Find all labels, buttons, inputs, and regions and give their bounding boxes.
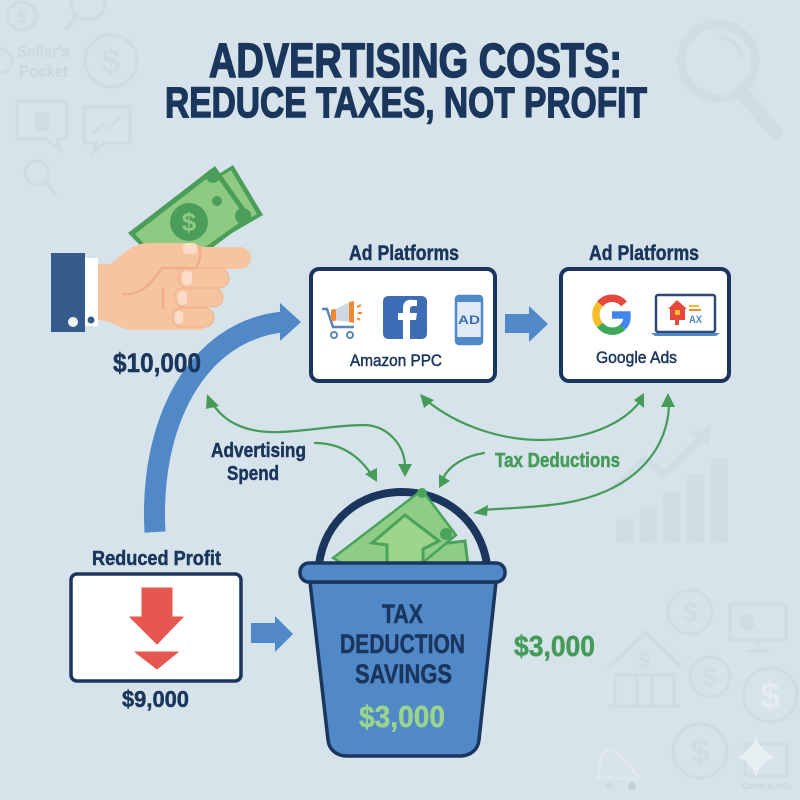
watermark icons: bottom right: Cook's Ads xyxy=(742,781,792,791)
icon: laptop ad: AX xyxy=(689,314,703,326)
amount: green $3,000: $3,000 xyxy=(514,631,595,663)
icon: red down arrow xyxy=(130,588,183,644)
label: tax deductions: Tax Deductions xyxy=(495,450,620,472)
arrow: profit to bucket xyxy=(251,616,293,652)
title: ADVERTISING COSTS: xyxy=(209,35,622,88)
panel: amazon ppc platforms xyxy=(311,269,495,381)
arrow: tax deductions to bucket xyxy=(439,453,484,488)
bucket: tax deduction savings xyxy=(300,488,505,756)
bucket text: SAVINGS xyxy=(355,659,452,689)
heading: ad platforms right: Ad Platforms xyxy=(589,242,699,265)
bucket text xyxy=(340,599,465,734)
label: amazon ppc: Amazon PPC xyxy=(350,351,442,370)
label: advertising spend: Advertising xyxy=(211,440,306,462)
amount: $9,000: $9,000 xyxy=(122,686,189,712)
arrow: google ads to bucket xyxy=(473,393,675,516)
icon: laptop ad xyxy=(651,295,720,336)
label: advertising spend: Spend xyxy=(227,463,279,485)
watermark icons: top left: $ xyxy=(102,43,121,81)
watermark icons: bottom right: $ xyxy=(703,662,718,692)
watermark icons: bottom right: $ xyxy=(691,733,710,771)
label: google ads: Google Ads xyxy=(596,348,677,367)
icon: google logo xyxy=(596,298,627,331)
watermark icons: bottom right: $ xyxy=(682,597,698,628)
cash in bucket xyxy=(333,488,468,565)
panel: google ads platforms xyxy=(561,269,729,381)
watermark icons: bottom right xyxy=(598,590,797,791)
icon: red small triangle xyxy=(135,652,178,669)
icon: phone ad: AD xyxy=(458,313,480,327)
watermark icons: top left: $ xyxy=(17,7,27,27)
arrow: green double-headed spend to bucket xyxy=(206,394,412,477)
arrow: spend flow to ad platforms xyxy=(154,303,301,532)
bucket text: $3,000 xyxy=(359,699,445,734)
icon: phone ad xyxy=(456,296,482,344)
watermark icon: magnifying glass xyxy=(681,24,776,133)
icon: banknotes: $ xyxy=(182,207,197,237)
bucket handle xyxy=(319,492,487,564)
hand palm and fingers xyxy=(98,243,251,330)
panel: reduced profit xyxy=(71,574,241,681)
icon: facebook logo xyxy=(383,296,427,339)
icon: hand holding cash xyxy=(51,165,263,332)
title xyxy=(165,35,647,127)
title: REDUCE TAXES, NOT PROFIT xyxy=(165,79,647,127)
watermark icons: top left xyxy=(0,0,137,195)
arrow: green double-headed between platforms xyxy=(420,393,644,440)
arrow: between platforms xyxy=(505,306,548,342)
watermark icons: bottom right: $ xyxy=(638,648,650,673)
label: advertising spend xyxy=(211,440,306,485)
watermark icons: bottom right: $ xyxy=(760,675,780,716)
watermark icon: growth bar chart xyxy=(611,426,728,543)
icon: banknotes xyxy=(128,165,263,278)
heading: ad platforms left: Ad Platforms xyxy=(349,242,459,265)
watermark icons: top left: Seller's xyxy=(17,42,70,61)
watermark icons: top left: Pocket xyxy=(19,62,68,81)
bucket body xyxy=(310,582,496,756)
amount: $10,000: $10,000 xyxy=(113,348,201,378)
bucket text: TAX xyxy=(382,599,423,629)
cuff button sleeve xyxy=(51,253,98,332)
icon: cart and megaphone xyxy=(322,301,362,338)
arrow: advertising spend to bucket xyxy=(315,443,377,482)
label: reduced profit: Reduced Profit xyxy=(92,548,221,570)
bucket rim xyxy=(300,563,505,582)
bucket text: DEDUCTION xyxy=(340,629,465,659)
